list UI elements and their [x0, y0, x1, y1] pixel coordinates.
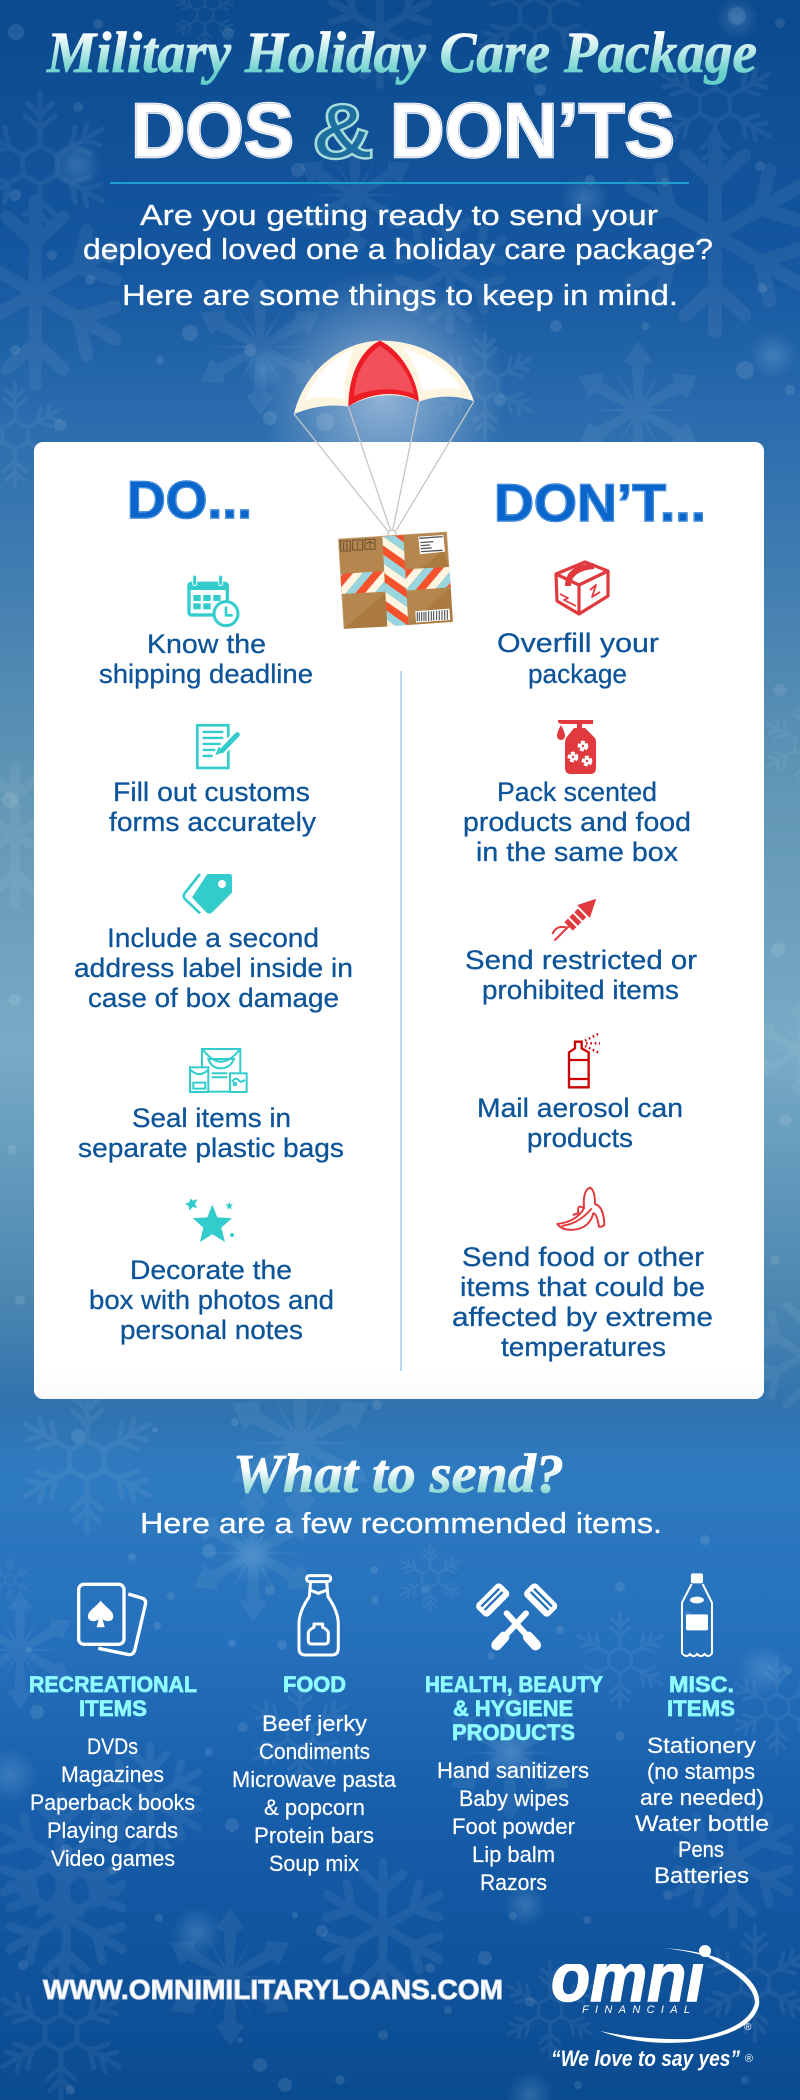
don't item: perishables [452, 1188, 713, 1362]
column: misc items: Stationery [647, 1733, 757, 1758]
icon: calendar with clock [187, 575, 238, 626]
intro text [83, 200, 713, 312]
do item: plastic bags [78, 1049, 344, 1163]
title rule [110, 182, 689, 184]
column: misc items [635, 1573, 769, 1888]
logo: Omni Financial: ® [744, 2022, 752, 2033]
don't item: aerosol [477, 1033, 683, 1153]
don't item: perishables: items that could be [460, 1272, 705, 1302]
heading: Don't: DON’T... [494, 474, 706, 533]
parachute with package [294, 341, 474, 629]
don't item: overfill: package [528, 659, 627, 689]
do item: second address label: address label inside in [74, 953, 353, 983]
column: misc items: MISC. [669, 1672, 734, 1697]
heading: Dos & Don'ts: DOS [131, 88, 294, 174]
column divider [400, 671, 402, 1371]
icon: aerosol can [569, 1033, 600, 1087]
column: health, beauty and hygiene: Razors [480, 1870, 547, 1895]
canopy [294, 341, 474, 414]
column: misc items: (no stamps [647, 1759, 755, 1784]
don't item: scented products: products and food [463, 807, 691, 837]
column: food: Soup mix [269, 1851, 360, 1876]
column: recreational items: DVDs [87, 1734, 138, 1759]
don't item: overfill: Overfill your [497, 628, 659, 658]
do item: customs forms: Fill out customs [113, 777, 310, 807]
don't item: scented products: Pack scented [497, 777, 657, 807]
column: misc items: Batteries [654, 1863, 749, 1888]
barcode [415, 609, 450, 623]
do item: shipping deadline [99, 575, 313, 689]
heading: Don't: DON’T... [494, 474, 706, 533]
column: health, beauty and hygiene: Lip balm [472, 1842, 555, 1867]
icon: tag [184, 874, 232, 914]
shipping label [418, 535, 445, 554]
logo: Omni Financial [551, 1938, 759, 2043]
do item: customs forms [109, 725, 317, 837]
column: recreational items: Magazines [61, 1762, 164, 1787]
column: recreational items [29, 1584, 197, 1871]
column: recreational items: RECREATIONAL [29, 1672, 197, 1697]
intro text: Are you getting ready to send your [140, 200, 658, 232]
heading: Do: DO... [127, 471, 252, 530]
column: food: FOOD [283, 1672, 346, 1697]
column: food: Condiments [259, 1739, 370, 1764]
icon: scented pump bottle [557, 720, 596, 774]
subheading: Here are a few recommended items. [140, 1508, 662, 1540]
logo: Omni Financial: FINANCIAL [582, 2004, 690, 2016]
don't item: scented products [463, 720, 691, 867]
heading: Dos & Don'ts: & [312, 87, 374, 175]
don't item: restricted items [465, 892, 697, 1005]
icon: water bottle [682, 1573, 712, 1656]
do item: shipping deadline: shipping deadline [99, 659, 313, 689]
do item: second address label: Include a second [107, 923, 319, 953]
icon: form and pen [197, 725, 237, 768]
do item: plastic bags: separate plastic bags [78, 1133, 344, 1163]
do item: plastic bags: Seal items in [132, 1103, 291, 1133]
do item: decorate the box [89, 1198, 334, 1345]
icon: ketchup bottle [299, 1576, 338, 1655]
column: misc items: ITEMS [667, 1696, 735, 1721]
column: misc items: Pens [678, 1837, 724, 1862]
panel: dos and don'ts card [34, 442, 764, 1399]
heading: Dos & Don'ts: DOS [131, 88, 294, 174]
tagline: ® [745, 2053, 753, 2065]
column: misc items: are needed) [640, 1785, 764, 1810]
logo: Omni Financial: omni [551, 1938, 705, 2016]
don't item: scented products: in the same box [476, 837, 679, 867]
column: food: Beef jerky [262, 1711, 368, 1736]
heading: Dos & Don'ts [131, 87, 675, 175]
do item: decorate the box: box with photos and [89, 1285, 334, 1315]
column: recreational items: Playing cards [47, 1818, 178, 1843]
column: health, beauty and hygiene: HEALTH, BEAUTY [425, 1672, 603, 1697]
heading: Do: DO... [127, 471, 252, 530]
column: recreational items: Video games [51, 1846, 175, 1871]
don't item: restricted items: Send restricted or [465, 945, 697, 975]
column: recreational items: Paperback books [30, 1790, 195, 1815]
do item: second address label: case of box damage [88, 983, 339, 1013]
do item: shipping deadline: Know the [147, 629, 266, 659]
column: food: Microwave pasta [232, 1767, 396, 1792]
tagline: “We love to say yes” [551, 2046, 740, 2071]
icon: sealed bags [190, 1049, 247, 1092]
column: food [232, 1576, 396, 1876]
website url: WWW.OMNIMILITARYLOANS.COM [43, 1974, 503, 2005]
column: health, beauty and hygiene [425, 1582, 603, 1895]
heading: What to send?: What to send? [233, 1443, 564, 1504]
don't item: overfill [497, 562, 659, 689]
don't item: aerosol: products [527, 1123, 633, 1153]
don't item: perishables: affected by extreme [452, 1302, 713, 1332]
column: misc items: Water bottle [635, 1811, 769, 1836]
don't item: restricted items: prohibited items [482, 975, 679, 1005]
title: Military Holiday Care Package: Military Holiday Care Package [46, 20, 757, 85]
intro text: deployed loved one a holiday care package? [83, 234, 713, 266]
icon: bursting box [556, 562, 608, 614]
column: health, beauty and hygiene: Foot powder [452, 1814, 575, 1839]
column: health, beauty and hygiene: PRODUCTS [452, 1720, 575, 1745]
heading: Dos & Don'ts: DON’TS [390, 88, 675, 174]
column: health, beauty and hygiene: Baby wipes [459, 1786, 569, 1811]
don't item: perishables: Send food or other [462, 1242, 704, 1272]
column: food: Protein bars [254, 1823, 374, 1848]
handling marks [340, 539, 375, 551]
website url: WWW.OMNIMILITARYLOANS.COM [43, 1974, 503, 2005]
icon: firework rocket [548, 892, 603, 947]
column: food: & popcorn [264, 1795, 365, 1820]
do item: decorate the box: personal notes [120, 1315, 303, 1345]
icon: crossed razors [474, 1582, 559, 1645]
do item: second address label [74, 874, 353, 1013]
icon: playing cards [79, 1584, 146, 1655]
package [338, 532, 453, 629]
column: health, beauty and hygiene: Hand sanitizers [437, 1758, 589, 1783]
do item: customs forms: forms accurately [109, 807, 317, 837]
parachute cords [294, 401, 474, 532]
do item: decorate the box: Decorate the [130, 1255, 292, 1285]
column: recreational items: ITEMS [79, 1696, 147, 1721]
icon: banana [557, 1188, 604, 1230]
don't item: perishables: temperatures [501, 1332, 666, 1362]
icon: stars [185, 1198, 234, 1242]
intro text: Here are some things to keep in mind. [122, 280, 678, 312]
don't item: aerosol: Mail aerosol can [477, 1093, 683, 1123]
column: health, beauty and hygiene: & HYGIENE [453, 1696, 573, 1721]
heading: Dos & Don'ts: DON’TS [390, 88, 675, 174]
